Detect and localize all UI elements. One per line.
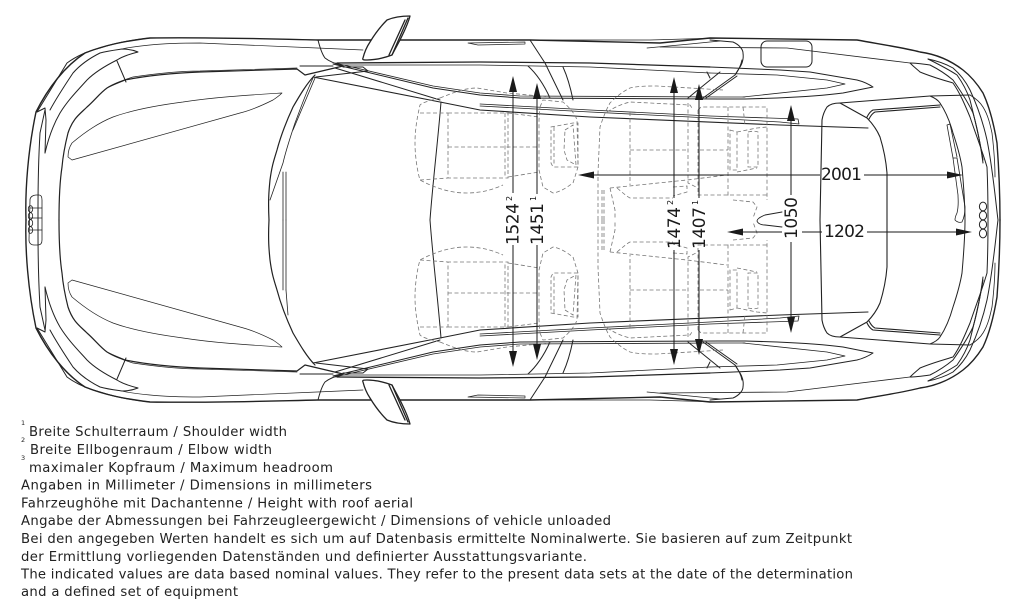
- dimension: 1474: 1474: [665, 207, 685, 249]
- dimension: 1407: 1: [691, 200, 700, 205]
- footnotes text block: [20, 419, 853, 600]
- footnote lines: Bei den angegeben Werten handelt es sich um auf Datenbasis ermittelte Nominalwerte. Sie basieren auf zum Zeitpunkt: [21, 532, 852, 547]
- footnote lines: der Ermittlung vorliegenden Datenständen und definierter Ausstattungsvariante.: [21, 550, 587, 565]
- dimension: 1451: 1451: [528, 203, 548, 245]
- dimension: 1524 shoulder: [504, 76, 524, 367]
- dimension: 1202: 1202: [824, 222, 865, 242]
- dimension: 1474: [665, 77, 685, 365]
- mirror: [363, 16, 410, 60]
- dimension: 1202: [727, 222, 972, 242]
- front seat lower: [415, 247, 578, 352]
- dimension: 1050: [782, 105, 802, 333]
- rear seat lower: [598, 220, 767, 354]
- car body: upper half: [26, 16, 1000, 222]
- seats: dashed outlines: [415, 86, 767, 354]
- dimension: 1407: [690, 84, 710, 355]
- footnote lines: Angabe der Abmessungen bei Fahrzeugleergewicht / Dimensions of vehicle unloaded: [21, 514, 611, 529]
- hood crease: [68, 93, 282, 160]
- icon: front rings logo: [28, 195, 42, 245]
- footnote lines: The indicated values are data based nominal values. They refer to the present data sets at the date of the determination: [20, 568, 853, 582]
- car body: lower half: [26, 220, 1000, 424]
- footnote lines: Breite Schulterraum / Shoulder width: [29, 425, 287, 440]
- dimension: 1524 shoulder: 2: [505, 196, 514, 201]
- icon: rear centre marker: [757, 212, 782, 227]
- dimension: 1050: 1050: [782, 197, 802, 239]
- doors: [530, 40, 563, 100]
- dimension: 2001: 2001: [821, 165, 862, 185]
- car top view drawing: [26, 16, 1000, 424]
- rear seat upper: [598, 86, 767, 220]
- footnote markers: 1: [21, 419, 25, 427]
- A pillar: [318, 40, 343, 66]
- footnote lines: Breite Ellbogenraum / Elbow width: [30, 443, 272, 458]
- fuel door: [761, 41, 812, 67]
- footnote markers: 3: [21, 454, 25, 462]
- rear side window: [710, 67, 873, 99]
- dimension: 1451: [528, 83, 548, 360]
- icon: rear rings logo: [979, 202, 987, 238]
- footnote markers: 2: [21, 436, 25, 444]
- dimension: 2001: [578, 165, 963, 185]
- windshield base and wiper: [269, 75, 315, 220]
- footnote lines: Fahrzeughöhe mit Dachantenne / Height with roof aerial: [21, 496, 413, 512]
- footnote lines: and a defined set of equipment: [21, 585, 238, 600]
- dimension: 1524 shoulder: 1524: [504, 203, 524, 245]
- dimension: 1451: 1: [529, 196, 538, 201]
- dimension: 1474: 2: [666, 200, 675, 205]
- rear wiper: [947, 124, 965, 222]
- footnote lines: Angaben in Millimeter / Dimensions in millimeters: [21, 478, 372, 494]
- tail: [928, 59, 998, 220]
- footnote lines: [20, 425, 853, 600]
- dimension: 1407: 1407: [690, 207, 710, 249]
- rear window: [820, 103, 887, 220]
- footnote markers: [21, 419, 25, 462]
- footnote lines: maximaler Kopfraum / Maximum headroom: [29, 461, 333, 476]
- front seat upper: [415, 88, 578, 193]
